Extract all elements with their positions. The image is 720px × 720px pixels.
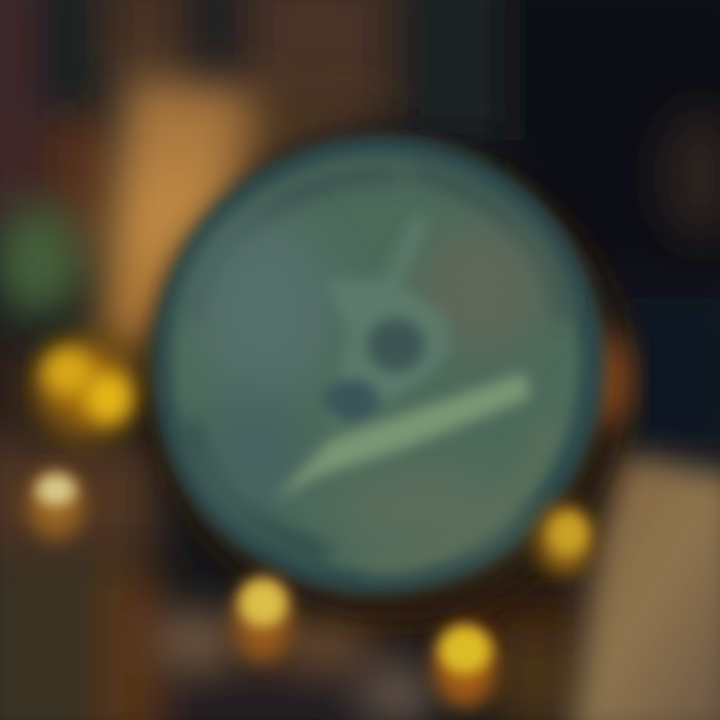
icon: glow bottom left [233,578,293,662]
icon: glow left small [28,471,84,539]
panel: tan block lower right [570,450,720,720]
orange rim accent [590,332,630,428]
distant warm glow, top right [660,107,720,243]
coin emblem [275,215,530,500]
icon: coin [100,84,656,646]
coin rim shading [190,170,565,565]
coin face patches [195,220,545,550]
icon: yellow glow left large [33,338,137,438]
icon: green blob [0,204,84,320]
panel: tan block behind coin [95,70,400,360]
lower left table [0,440,590,720]
icon: glow right [535,504,595,576]
brown shadow under coin [90,83,694,687]
icon: glow bottom centre [433,624,497,708]
